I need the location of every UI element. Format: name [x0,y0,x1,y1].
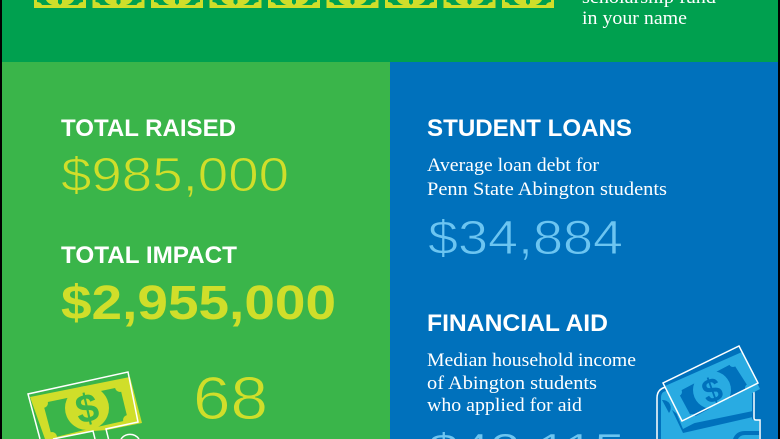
panel: top banner [2,0,778,62]
text: median household income: of Abington students [427,374,597,394]
icon: wallet with dollar bill [657,346,760,439]
heading: total impact: TOTAL IMPACT [61,242,237,269]
text: median household income [427,351,636,416]
heading: student loans: STUDENT LOANS [427,115,632,142]
number: 68: 68 [193,365,268,432]
heading: financial aid: FINANCIAL AID [427,310,608,337]
number: average debt: $34,884 [428,212,623,265]
text: median household income: Median household income [427,351,636,371]
heading: total raised: TOTAL RAISED [61,115,236,142]
number: total raised: $985,000 [61,149,289,202]
text: average loan debt: Average loan debt for [427,156,599,176]
text: average loan debt [427,156,667,200]
text: median household income: who applied for aid [427,396,583,416]
icon: row of dollar bills [34,0,554,8]
text: scholarship fund note [582,0,717,29]
text: scholarship fund note: in your name [582,9,687,29]
number: total impact: $2,955,000 [61,277,336,330]
icon: hand holding dollar bill: $ [71,385,103,433]
icon: hand holding dollar bill [28,372,142,439]
icon: wallet with dollar bill: $ [697,370,728,412]
text: average loan debt: Penn State Abington students [427,180,667,200]
panel: student loans and financial aid [390,62,778,439]
panel: total raised and impact [2,62,390,439]
